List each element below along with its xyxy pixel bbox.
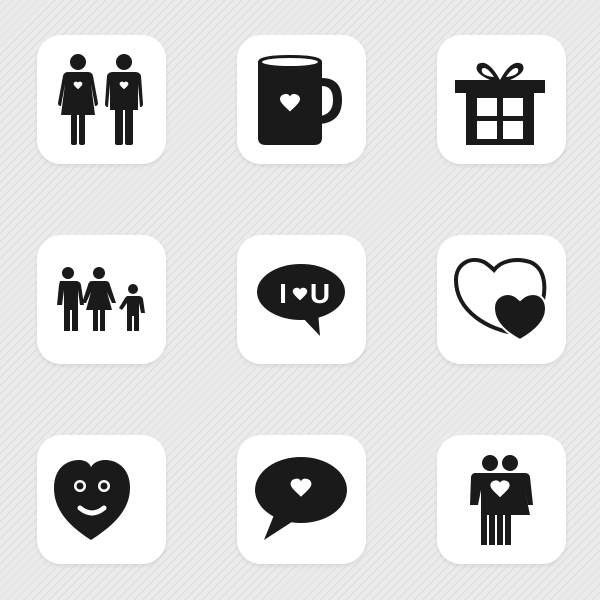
icon: I love U bubble: I (279, 278, 287, 309)
tile: two hearts (437, 235, 566, 364)
tile: couple (37, 35, 166, 164)
icon: smiley heart (54, 460, 130, 540)
icon: two hearts (456, 260, 546, 340)
tile: gift (437, 35, 566, 164)
tile: mug (237, 35, 366, 164)
tile: hugging couple (437, 435, 566, 564)
tile: family (37, 235, 166, 364)
icon: mug (258, 55, 342, 145)
icon: family (57, 267, 145, 331)
icon: couple (58, 54, 143, 145)
icon: hugging couple (470, 455, 533, 545)
tile: I love U bubble (237, 235, 366, 364)
icon: I love U bubble (257, 264, 345, 336)
tile: heart bubble (237, 435, 366, 564)
icon: heart bubble (255, 457, 347, 540)
icon: gift (455, 63, 545, 145)
tile: smiley heart (37, 435, 166, 564)
icon: I love U bubble: U (310, 278, 330, 309)
